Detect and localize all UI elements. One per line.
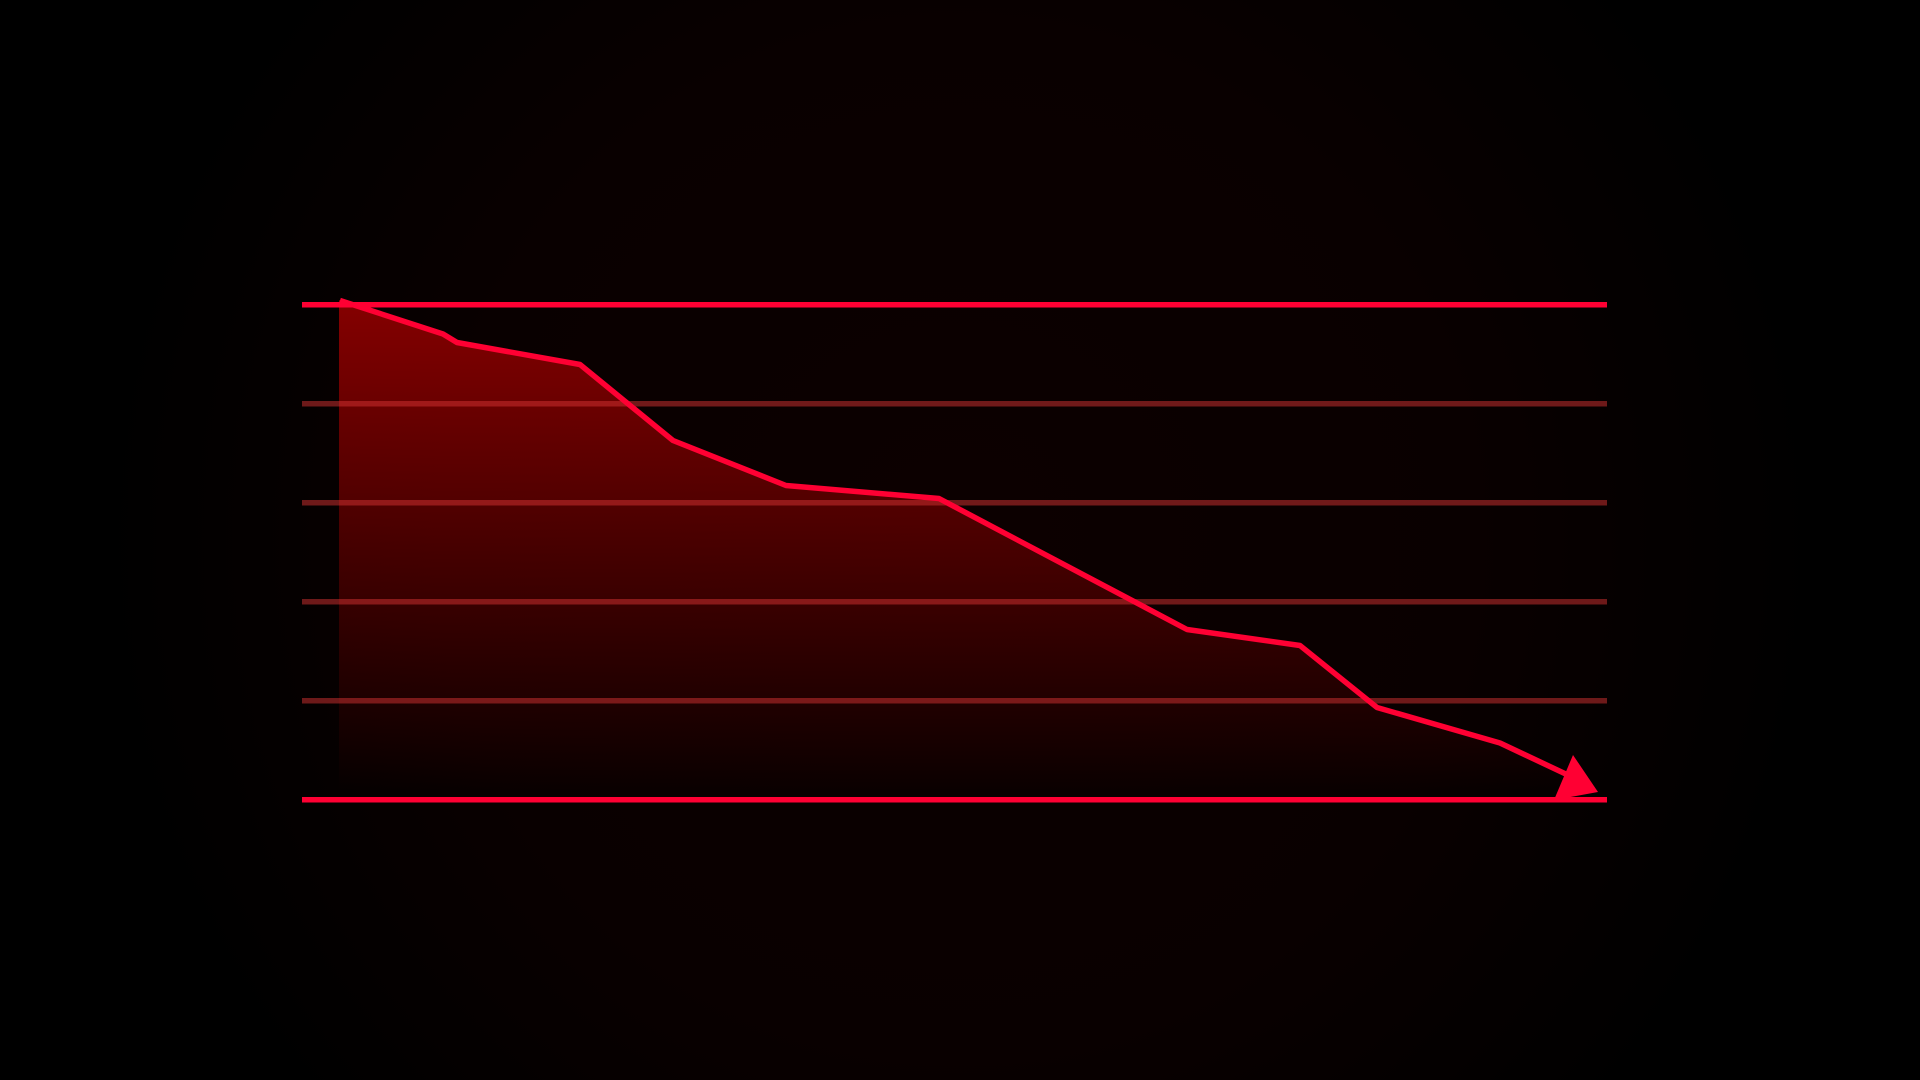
- bottom boundary line: [302, 797, 1607, 802]
- horizontal grid lines: [302, 401, 1607, 704]
- area fill under line: [339, 300, 1570, 800]
- declining trend line: [340, 300, 1570, 776]
- arrow head: [1554, 755, 1598, 800]
- top boundary line: [302, 302, 1607, 308]
